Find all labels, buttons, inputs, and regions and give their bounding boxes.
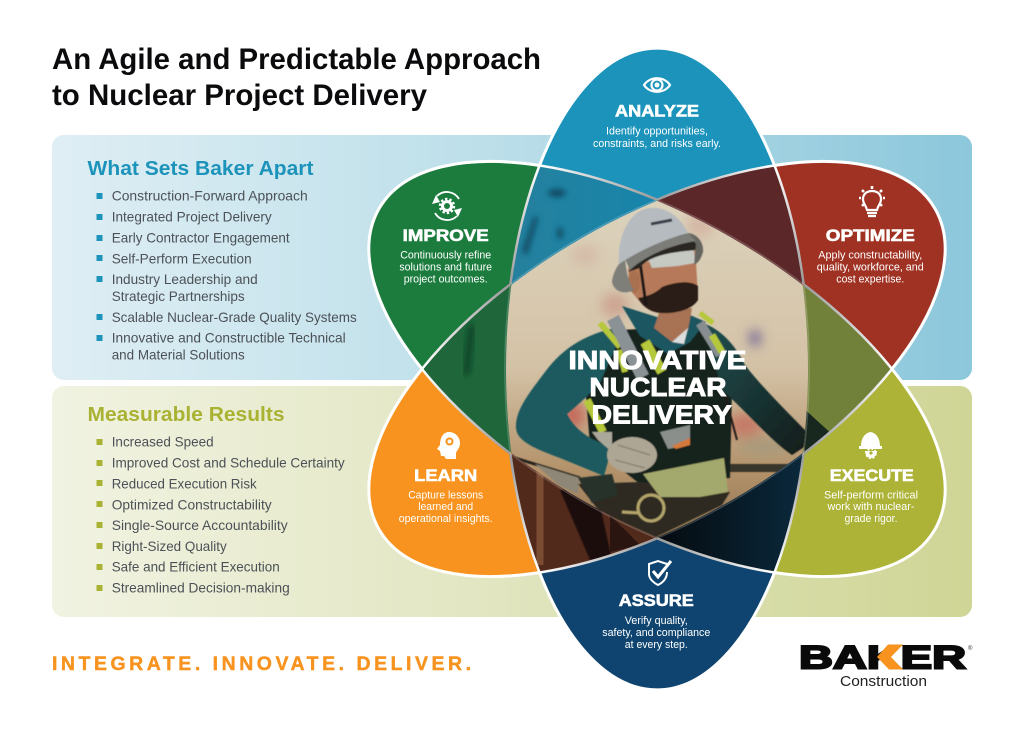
- centre label: INNOVATIVE: [568, 345, 746, 375]
- list: results: Improved Cost and Schedule Certainty: [112, 455, 345, 471]
- petal: improve: [399, 192, 492, 286]
- list: differentiators: Integrated Project Delivery: [112, 209, 272, 225]
- list: differentiators: Self-Perform Execution: [112, 250, 252, 266]
- petal: optimize: OPTIMIZE: [826, 227, 915, 245]
- petal: analyze: [593, 78, 721, 150]
- list: results: Right-Sized Quality: [112, 538, 227, 554]
- logo: Baker Construction: ®: [968, 645, 973, 652]
- centre label: NUCLEAR: [590, 372, 727, 402]
- icon: shield with check: [649, 561, 671, 585]
- icon: head with gear: [437, 432, 460, 459]
- petal: assure: safety, and compliance: [602, 627, 710, 639]
- list: results: Increased Speed: [112, 434, 214, 450]
- icon: gear with arrows: [432, 192, 462, 220]
- hood and neck: [622, 306, 706, 354]
- petal: execute: Self-perform critical: [824, 490, 918, 502]
- petal: optimize: quality, workforce, and: [817, 262, 924, 274]
- vest straps: [600, 323, 625, 372]
- infographic: [52, 48, 972, 688]
- centre label: DELIVERY: [592, 400, 732, 430]
- petal: analyze: Identify opportunities,: [606, 126, 708, 138]
- list: differentiators: Innovative and Constructible Technical: [112, 330, 346, 346]
- list: differentiators: Early Contractor Engagement: [112, 229, 290, 245]
- list: results: Optimized Constructability: [112, 496, 272, 512]
- petal: analyze: constraints, and risks early.: [593, 138, 721, 150]
- head: [628, 250, 698, 302]
- list: results: [96, 434, 345, 596]
- list: differentiators: [96, 188, 357, 363]
- petal: assure: [602, 561, 710, 651]
- icon: hard hat with gear: [859, 432, 882, 458]
- title: to Nuclear Project Delivery: [52, 79, 427, 112]
- panel: what sets Baker apart: [52, 135, 972, 380]
- icon: eye: [644, 78, 670, 92]
- petal: learn: operational insights.: [399, 513, 493, 525]
- logo: Baker Construction: [799, 640, 973, 690]
- list: results: Safe and Efficient Execution: [112, 559, 280, 575]
- petal: optimize: Apply constructability,: [818, 250, 922, 262]
- list: results: Single-Source Accountability: [112, 517, 288, 533]
- logo: Baker Construction: Construction: [840, 674, 927, 690]
- overlap: top-left blue: [511, 167, 657, 285]
- list: results: Reduced Execution Risk: [112, 475, 258, 491]
- title: An Agile and Predictable Approach: [52, 43, 541, 76]
- belt: [578, 482, 730, 537]
- heading: measurable results: Measurable Results: [88, 403, 284, 426]
- petal: assure: ASSURE: [619, 592, 694, 610]
- diagram: six-petal delivery cycle: [367, 50, 947, 688]
- right arm: [706, 324, 806, 456]
- icon: light bulb: [859, 186, 885, 216]
- petal: execute: EXECUTE: [830, 467, 914, 485]
- logo: Baker Construction: BAKER: [799, 640, 966, 676]
- petal: learn: LEARN: [414, 467, 477, 485]
- petal: improve: solutions and future: [399, 262, 492, 274]
- petal: analyze: ANALYZE: [615, 103, 699, 121]
- petal: learn: [399, 432, 493, 525]
- petal: optimize: [817, 186, 924, 286]
- torso: [585, 326, 732, 484]
- hard hat: [628, 240, 697, 272]
- panel: measurable results: [52, 386, 972, 617]
- list: differentiators: and Material Solutions: [112, 347, 245, 363]
- heading: what sets Baker apart: What Sets Baker Apart: [88, 157, 314, 180]
- list: differentiators: Scalable Nuclear-Grade Quality Systems: [112, 309, 357, 325]
- list: differentiators: Construction-Forward Approach: [112, 188, 308, 204]
- title: [52, 43, 541, 112]
- overlap: bottom-right navy: [650, 450, 803, 571]
- glove: [607, 437, 657, 473]
- left arm: [516, 326, 625, 476]
- petal: assure: at every step.: [625, 639, 688, 651]
- list: differentiators: Strategic Partnerships: [112, 288, 245, 304]
- list: differentiators: Industry Leadership and: [112, 271, 258, 287]
- petal: execute: work with nuclear-: [827, 501, 915, 513]
- petal: execute: [824, 432, 918, 525]
- petal: learn: Capture lessons: [408, 490, 484, 502]
- petal: improve: Continuously refine: [400, 250, 491, 262]
- photo: worker in hard hat: [500, 195, 815, 540]
- petal: improve: IMPROVE: [403, 227, 489, 245]
- slogan: INTEGRATE. INNOVATE. DELIVER.: [52, 653, 471, 675]
- petals: [304, 49, 1010, 689]
- petal outlines: [303, 48, 1011, 690]
- petal: learn: learned and: [418, 501, 473, 513]
- petal: assure: Verify quality,: [625, 615, 688, 627]
- overlap: left green: [420, 280, 515, 460]
- centre label: [568, 345, 746, 430]
- list: results: Streamlined Decision-making: [112, 580, 290, 596]
- overlap: top-right maroon: [650, 167, 803, 285]
- petal: execute: grade rigor.: [844, 513, 898, 525]
- petal: improve: project outcomes.: [404, 274, 488, 286]
- overlap: right olive: [800, 283, 890, 453]
- overlap: bottom-left brown: [511, 451, 657, 571]
- petal: optimize: cost expertise.: [836, 274, 904, 286]
